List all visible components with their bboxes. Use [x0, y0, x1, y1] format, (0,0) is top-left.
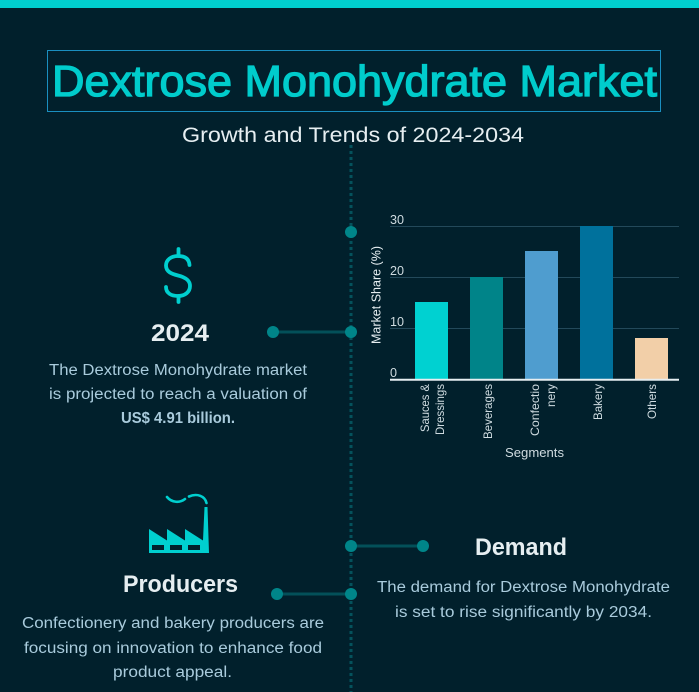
y axis title: Market Share (%) [370, 246, 384, 344]
title: Dextrose Monohydrate Market [52, 58, 657, 106]
heading: 2024: 2024 [151, 320, 209, 347]
heading: Producers: Producers [123, 571, 238, 598]
text block: 2024 valuation: is projected to reach a valuation of [49, 386, 308, 403]
icon: factory [149, 495, 209, 553]
bar chart: market share by segment [370, 213, 679, 460]
x axis title: Segments [505, 446, 564, 460]
text block: Producers: focusing on innovation to enhance food [24, 640, 322, 657]
text block: Demand [377, 579, 670, 621]
icon: dollar sign [166, 249, 190, 302]
text block: Producers: product appeal. [113, 664, 232, 681]
category labels: Beverages [481, 384, 495, 439]
top accent bar [0, 0, 699, 8]
text block: Demand: The demand for Dextrose Monohydrate [377, 579, 670, 596]
y axis ticks: 10 [390, 315, 404, 329]
text block: Demand: is set to rise significantly by 2034. [395, 604, 652, 621]
y axis ticks [390, 213, 404, 380]
text block: Producers [22, 615, 324, 681]
text block: 2024 valuation: The Dextrose Monohydrate market [49, 362, 308, 379]
timeline: dotted spine with connector nodes [267, 145, 429, 692]
y axis ticks: 20 [390, 264, 404, 278]
bars [415, 226, 668, 379]
category labels: Others [645, 384, 659, 419]
heading: Demand: Demand [475, 534, 567, 561]
subtitle: Growth and Trends of 2024-2034 [182, 123, 524, 147]
y axis ticks: 30 [390, 213, 404, 227]
text block: Producers: Confectionery and bakery producers are [22, 615, 324, 632]
category labels [418, 384, 659, 439]
category labels: Sauces & [418, 384, 432, 432]
category labels: Bakery [591, 384, 605, 420]
category labels: nery [544, 384, 558, 407]
text block: 2024 valuation: US$ 4.91 billion. [121, 410, 235, 427]
text block: 2024 valuation [49, 362, 308, 427]
y axis ticks: 0 [390, 366, 397, 380]
category labels: Dressings [433, 384, 447, 435]
category labels: Confectio [528, 384, 542, 436]
